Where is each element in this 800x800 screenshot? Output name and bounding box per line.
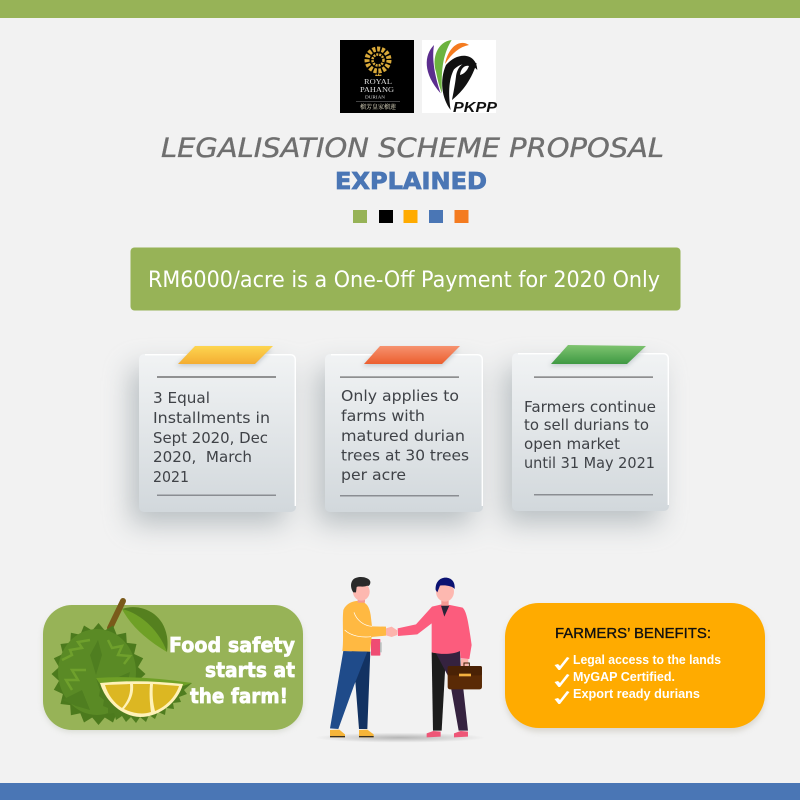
card 1: Installments in <box>153 409 270 427</box>
banner <box>130 248 680 310</box>
card 2 <box>325 346 483 512</box>
illustration: handshake <box>315 577 485 743</box>
benefit list: Export ready durians <box>573 687 700 701</box>
panel: food safety <box>43 601 303 732</box>
card 3: to sell durians to <box>524 416 649 434</box>
card 2: trees at 30 trees <box>341 446 469 464</box>
food safety text: the farm! <box>190 684 288 708</box>
top green bar <box>0 0 800 18</box>
benefit list: MyGAP Certified. <box>573 670 675 684</box>
card 1: 2021 <box>153 468 189 486</box>
card 3 <box>512 345 669 511</box>
card 3: Farmers continue <box>524 398 656 416</box>
colour squares <box>353 210 468 223</box>
card 1: Sept 2020, Dec <box>153 429 268 447</box>
logo: Royal Pahang Durian: PAHANG <box>360 85 395 94</box>
card shadows <box>131 367 659 524</box>
icon: durian slice <box>96 677 192 723</box>
card 2: matured durian <box>341 427 465 445</box>
card 1: 3 Equal <box>153 389 210 407</box>
icon: durian <box>52 601 192 725</box>
logo: PKPP: PKPP <box>453 99 498 116</box>
logo: Royal Pahang Durian: DURIAN <box>365 94 386 100</box>
right man <box>398 578 482 737</box>
briefcase <box>448 663 482 689</box>
logo: Royal Pahang Durian: ROYAL <box>364 77 392 86</box>
food safety text: starts at <box>205 658 295 682</box>
logo: Royal Pahang Durian <box>340 40 414 113</box>
benefits heading: FARMERS’ BENEFITS: <box>555 626 711 642</box>
card 3: until 31 May 2021 <box>524 454 655 472</box>
card 1 <box>139 346 296 512</box>
food safety text <box>169 633 295 708</box>
card 2: farms with <box>341 407 425 425</box>
bottom blue bar <box>0 783 800 800</box>
panel: farmers' benefits <box>505 603 765 732</box>
card 1: 2020, March <box>153 448 252 466</box>
card 3: open market <box>524 435 620 453</box>
logo: PKPP <box>422 40 498 116</box>
benefit list: Legal access to the lands <box>573 653 721 667</box>
left man <box>330 577 397 737</box>
title: LEGALISATION SCHEME PROPOSAL <box>161 133 664 164</box>
subtitle: EXPLAINED <box>335 167 487 195</box>
food safety text: Food safety <box>169 633 295 657</box>
logo: Royal Pahang Durian: 榴芳皇家榴莲 <box>360 102 396 111</box>
banner: RM6000/acre is a One-Off Payment for 2020 Only <box>148 267 660 293</box>
benefit list <box>554 653 721 704</box>
card 2: Only applies to <box>341 387 459 405</box>
card 2: per acre <box>341 466 406 484</box>
